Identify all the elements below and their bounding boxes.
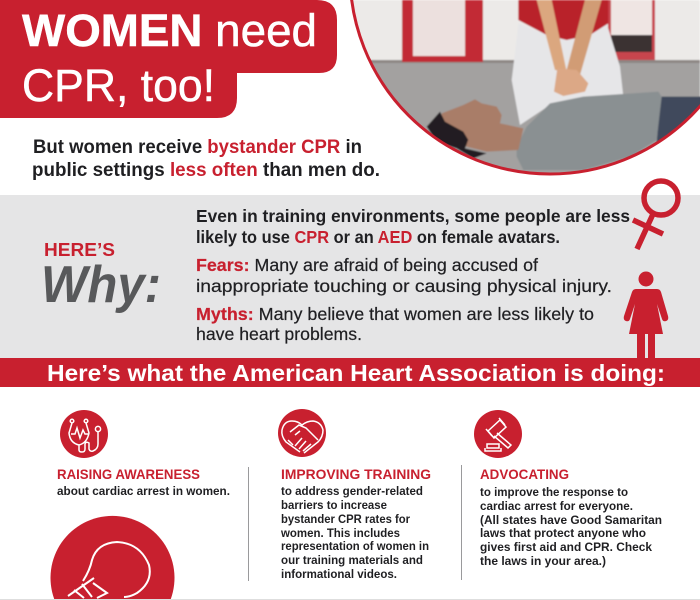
text block: advocating: (All states have Good Samaritan [480, 513, 662, 527]
text block: improving training: our training materials and [281, 553, 423, 567]
heading: here's why: Why: [41, 256, 161, 314]
text block: reasons [196, 206, 630, 344]
text block: advocating: cardiac arrest for everyone. [480, 499, 633, 513]
text block: improving training: IMPROVING TRAINING [281, 466, 431, 482]
icon: handshake heart [278, 409, 326, 457]
subtitle [32, 137, 380, 181]
text block: improving training: to address gender-related [281, 484, 423, 498]
text block: reasons: inappropriate touching or causing physical injury. [196, 276, 612, 296]
text block: advocating: gives first aid and CPR. Check [480, 540, 652, 554]
text block: improving training [280, 466, 431, 581]
icon: female symbol [633, 181, 678, 249]
text block: reasons: Fears: Many are afraid of being accused of [196, 255, 538, 275]
text block: reasons: Myths: Many believe that women are less likely to [196, 304, 594, 324]
icon: light bulb [50, 516, 174, 599]
title banner [0, 0, 337, 118]
text block: improving training: bystander CPR rates for [281, 512, 410, 526]
panel: why section background [0, 195, 700, 358]
divider [248, 467, 249, 581]
text block: raising awareness: RAISING AWARENESS [57, 466, 200, 482]
text block: advocating: laws that protect anyone who [480, 526, 646, 540]
subtitle: But women receive bystander CPR in [33, 137, 362, 158]
banner: what the AHA is doing: Here’s what the American Heart Association is doing: [47, 360, 665, 386]
text block: advocating: the laws in your area.) [480, 554, 606, 568]
text block: reasons: Even in training environments, some people are less [196, 206, 630, 226]
text block: reasons: likely to use CPR or an AED on female avatars. [196, 227, 560, 247]
subtitle: public settings less often than men do. [32, 160, 380, 181]
photo: bystander performing CPR on a man [340, 0, 700, 180]
icon: woman figure [624, 272, 668, 359]
text block: improving training: representation of women in [281, 539, 429, 553]
text block: advocating: ADVOCATING [480, 466, 569, 482]
divider [461, 465, 462, 580]
text block: improving training: barriers to increase [281, 498, 387, 512]
text block: raising awareness: about cardiac arrest in women. [57, 484, 230, 498]
text block: improving training: women. This includes [280, 526, 400, 540]
icon: stethoscope [60, 410, 108, 458]
text block: improving training: informational videos. [281, 567, 397, 581]
text block: reasons: have heart problems. [196, 324, 362, 344]
text block: raising awareness [57, 466, 230, 498]
title text line 1: WOMEN need [22, 5, 317, 56]
heading: here's why: HERE’S [44, 240, 115, 260]
text block: advocating: to improve the response to [480, 485, 628, 499]
icon: gavel [474, 410, 522, 458]
text block: advocating [480, 466, 662, 568]
title text line 2: CPR, too! [22, 60, 215, 111]
